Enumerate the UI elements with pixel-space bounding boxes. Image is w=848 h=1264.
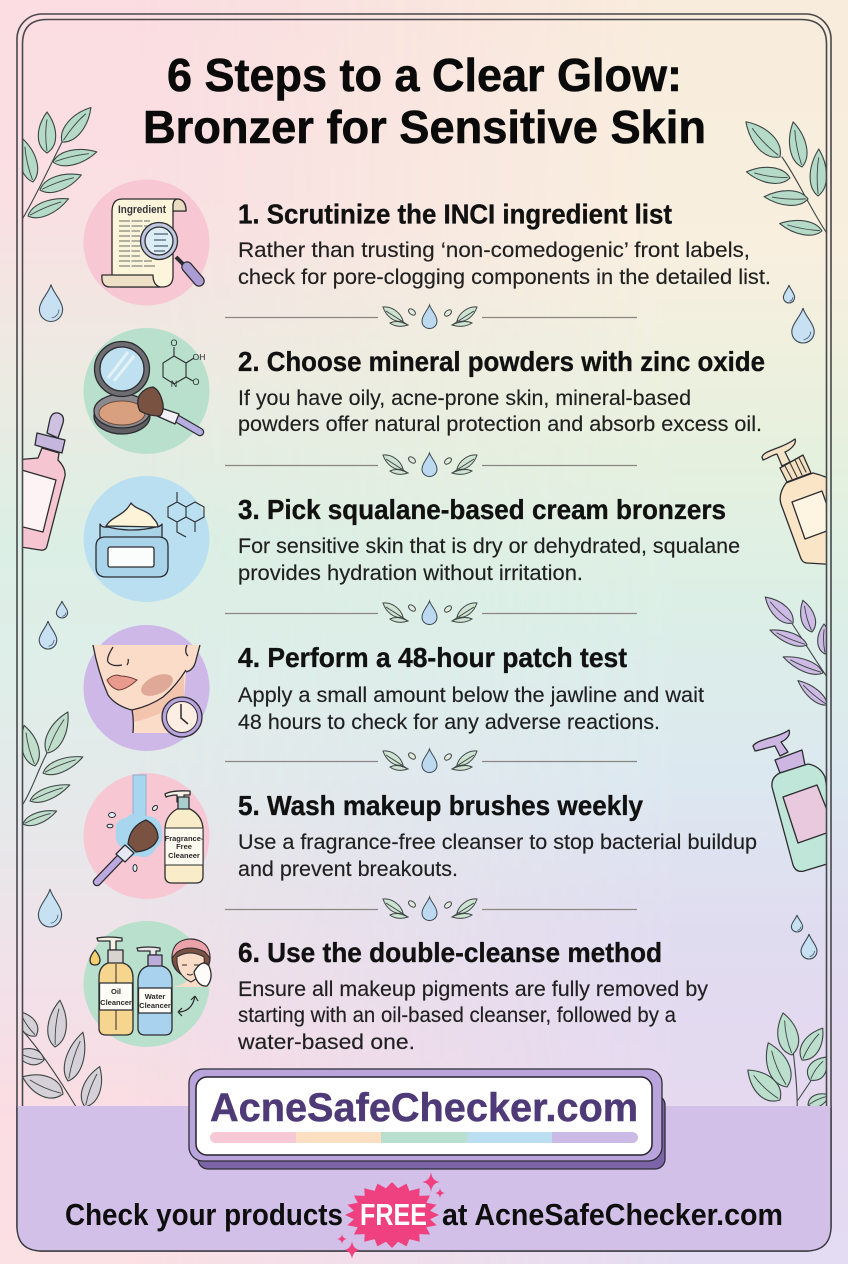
branch: left middle leaves — [23, 711, 84, 826]
call to action — [65, 1197, 783, 1232]
step 1 body — [238, 238, 771, 289]
step 6 icon: oil and water cleansers: Water — [145, 992, 165, 1001]
step 2 icon: compact and brush: O — [170, 338, 178, 348]
step 5 icon: brush wash and cleanser — [84, 773, 210, 899]
step 3 body — [238, 534, 740, 585]
step 1 icon: ingredient list and magnifier: Ingredient — [118, 204, 166, 216]
step 3 heading: 3. Pick squalane-based cream bronzers — [238, 494, 726, 525]
step 6 heading: 6. Use the double-cleanse method — [238, 937, 662, 968]
step 3 body: provides hydration without irritation. — [238, 561, 583, 585]
divider ornament — [225, 305, 637, 328]
step 2 body — [238, 386, 762, 436]
step 6 body: starting with an oil-based cleanser, followed by a — [238, 1003, 676, 1027]
icon: water drop small — [791, 915, 803, 932]
step 3 icon: cream jar — [84, 476, 210, 602]
step 5 heading: 5. Wash makeup brushes weekly — [238, 790, 644, 821]
icon: mint pump bottle — [752, 729, 826, 872]
step 6 icon: oil and water cleansers: Oil — [111, 987, 121, 996]
divider ornament — [225, 453, 637, 476]
step 1 body: check for pore-clogging components in the detailed list. — [238, 265, 771, 289]
badge wordmark: AcneSafeChecker.com — [210, 1086, 638, 1130]
footer panel — [17, 1107, 831, 1251]
divider ornament — [225, 897, 637, 920]
step 4 body: 48 hours to check for any adverse reactions. — [238, 710, 660, 734]
step 1 heading: 1. Scrutinize the INCI ingredient list — [238, 198, 672, 230]
branch: top right leaves — [745, 121, 826, 236]
step 2 icon: compact and brush: OH — [193, 352, 205, 362]
step 2 body: If you have oily, acne-prone skin, mineral-based — [238, 386, 691, 410]
step 4 icon: jawline patch test with clock — [84, 625, 210, 751]
call to action: at AcneSafeChecker.com — [442, 1197, 783, 1232]
step 5 body — [238, 830, 757, 881]
title — [143, 49, 706, 153]
branch: purple leaves — [764, 596, 826, 706]
step 1 body: Rather than trusting ‘non-comedogenic’ front labels, — [238, 238, 750, 262]
step 2 heading: 2. Choose mineral powders with zinc oxide — [238, 346, 765, 377]
step 4 heading: 4. Perform a 48-hour patch test — [238, 642, 627, 673]
title: 6 Steps to a Clear Glow: — [167, 49, 682, 101]
icon: water drop — [792, 308, 814, 343]
branch: bottom right green leaves — [747, 1012, 826, 1106]
step 1 icon: ingredient list and magnifier — [84, 180, 210, 306]
title: Bronzer for Sensitive Skin — [143, 101, 706, 153]
decorative botanicals and bottles — [12, 102, 840, 1110]
rainbow bar — [210, 1132, 638, 1143]
step 6 icon: oil and water cleansers: Cleancer — [100, 998, 132, 1007]
website badge — [189, 1069, 665, 1169]
branch: bottom left grey leaves — [23, 1000, 102, 1106]
step 2 icon: compact and brush — [84, 328, 210, 454]
step 6 body: Ensure all makeup pigments are fully removed by — [238, 977, 708, 1001]
step 2 icon: compact and brush: O — [192, 377, 200, 387]
step 4 body: Apply a small amount below the jawline and wait — [238, 683, 704, 707]
step 3 body: For sensitive skin that is dry or dehydrated, squalane — [238, 534, 740, 558]
step 2 body: powders offer natural protection and absorb excess oil. — [238, 412, 762, 436]
icon: dropper bottle — [23, 412, 66, 551]
icon: cream pump bottle — [761, 438, 826, 565]
step 5 icon: brush wash and cleanser: Cleaneer — [168, 851, 200, 860]
step 6 body — [237, 977, 708, 1054]
FREE starburst with sparkles — [337, 1172, 445, 1259]
icon: water drop — [38, 889, 62, 927]
icon: water drop small — [783, 285, 795, 303]
call to action: Check your products — [65, 1197, 343, 1232]
step 4 body — [238, 683, 704, 734]
icon: water drop — [39, 621, 57, 649]
step 6 icon: oil and water cleansers: Cleancer — [139, 1001, 171, 1010]
divider ornament — [225, 601, 637, 624]
branch: top left leaves — [23, 107, 98, 218]
step 6 icon: oil and water cleansers — [84, 921, 212, 1047]
step 2 icon: compact and brush: N — [171, 379, 177, 389]
icon: water drop small — [56, 601, 68, 618]
step 5 icon: brush wash and cleanser: Fragrance- — [165, 834, 204, 843]
step 5 body: and prevent breakouts. — [238, 857, 458, 881]
call to action: FREE — [360, 1197, 427, 1232]
step 5 icon: brush wash and cleanser: Free — [176, 842, 192, 851]
divider ornament — [225, 749, 637, 772]
step 6 body: water-based one. — [237, 1030, 415, 1054]
icon: water drop — [39, 284, 63, 322]
step 5 body: Use a fragrance-free cleanser to stop bacterial buildup — [238, 830, 757, 854]
icon: water drop — [801, 934, 817, 959]
